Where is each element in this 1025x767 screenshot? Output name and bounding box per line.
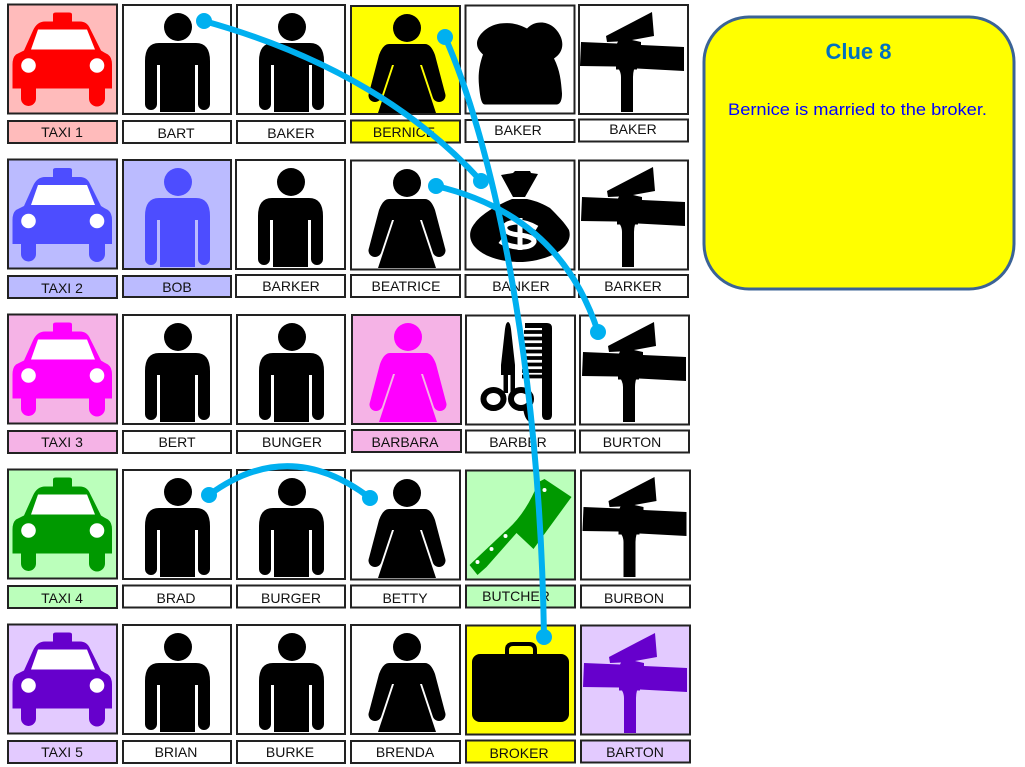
icon: Beatrice: [351, 160, 460, 270]
label: BERT: [123, 431, 231, 453]
label: BART: [123, 121, 231, 143]
row 1: red taxi: [8, 4, 688, 143]
label: TAXI 4: [8, 586, 117, 608]
label: BURGER: [237, 586, 345, 608]
label: BRIAN: BRIAN: [155, 744, 197, 760]
label: BAKER surname: BAKER: [267, 125, 315, 141]
connector: Bernice to broker: [437, 29, 552, 645]
label: BAKER surname: [237, 121, 345, 143]
label: BURKE: BURKE: [266, 744, 314, 760]
label: BROKER: BROKER: [489, 745, 549, 761]
icon: Brian: [123, 625, 231, 734]
label: TAXI 5: TAXI 5: [41, 744, 83, 760]
icon: taxi 1: [8, 4, 117, 114]
label: BURTON: BURTON: [603, 434, 661, 450]
label: BUTCHER: [466, 586, 575, 608]
icon: street sign: [579, 160, 688, 270]
row 4: green taxi: [8, 470, 690, 608]
label: BETTY: [351, 586, 460, 608]
label: TAXI 3: [8, 431, 117, 453]
label: BAKER occupation: [466, 120, 574, 142]
label: BRAD: BRAD: [157, 590, 195, 606]
icon: Bob: [123, 160, 231, 269]
icon: Bunger man: [237, 315, 345, 424]
label: BEATRICE: BEATRICE: [372, 278, 440, 294]
label: BARBARA: [352, 430, 461, 452]
row 3: magenta taxi: [8, 314, 689, 453]
label: BERT: BERT: [158, 434, 196, 450]
row 2: blue taxi: [8, 160, 688, 298]
icon: Bert: [123, 315, 231, 424]
icon: Burke man: [237, 625, 345, 734]
icon: Bernice: [351, 6, 460, 114]
label: BAKER street: BAKER: [609, 121, 657, 137]
label: BERNICE: BERNICE: [373, 124, 435, 140]
label: BRENDA: BRENDA: [376, 744, 435, 760]
icon: Baker man: [237, 5, 345, 114]
label: BARTON: [581, 740, 690, 762]
label: TAXI 5: [8, 741, 117, 763]
label: BRENDA: [351, 741, 460, 763]
label: BARBER: BARBER: [489, 434, 547, 450]
label: BUTCHER: BUTCHER: [482, 588, 550, 604]
label: BURBON: [581, 586, 690, 608]
text: clue sentence: Bernice is married to the broker.: [728, 100, 987, 119]
icon: bread: [466, 6, 574, 114]
label: BRAD: [123, 586, 231, 608]
label: TAXI 4: TAXI 4: [41, 590, 83, 606]
icon: Betty: [351, 470, 460, 580]
label: TAXI 3: TAXI 3: [41, 434, 83, 450]
icon: street sign: [579, 5, 688, 114]
label: BUNGER: BUNGER: [262, 434, 322, 450]
icon: Burger man: [237, 470, 345, 579]
connector: Beatrice to Burton: [428, 178, 606, 340]
icon: Barbara: [352, 315, 461, 424]
label: BARTON: BARTON: [606, 744, 664, 760]
label: BURKE: [237, 741, 345, 763]
row 5: purple taxi: [8, 624, 690, 763]
label: TAXI 1: TAXI 1: [41, 124, 83, 140]
label: BROKER: [466, 740, 575, 762]
label: BAKER occupation: BAKER: [494, 122, 542, 138]
label: BUNGER: [237, 431, 345, 453]
icon: street sign: [581, 470, 690, 580]
label: BURGER: BURGER: [261, 590, 321, 606]
label: BARKER street: [579, 275, 688, 297]
label: BARKER surname: [236, 275, 345, 297]
connector: Bart to banker: [196, 13, 489, 189]
connector: Brad to Betty: [201, 466, 378, 506]
label: BARBER: [466, 430, 575, 452]
label: BETTY: BETTY: [382, 590, 428, 606]
icon: Brad: [123, 470, 231, 579]
label: BANKER: BANKER: [492, 278, 550, 294]
label: BRIAN: [123, 741, 231, 763]
label: BURBON: BURBON: [604, 590, 664, 606]
label: BARKER surname: BARKER: [262, 278, 320, 294]
label: BURTON: [580, 430, 689, 452]
label: BARKER street: BARKER: [604, 278, 662, 294]
icon: money bag: [466, 160, 574, 270]
label: BART: BART: [157, 125, 195, 141]
icon: taxi 4: [8, 470, 117, 578]
icon: Bart: [123, 5, 231, 114]
label: TAXI 2: TAXI 2: [41, 280, 83, 296]
label: BANKER: [466, 275, 574, 297]
label: BOB: BOB: [162, 279, 192, 295]
icon: cleaver: [466, 470, 575, 580]
panel: clue 8: [704, 17, 1014, 289]
label: BOB: [123, 276, 231, 297]
label: TAXI 1: [8, 121, 117, 143]
icon: street sign: [580, 316, 689, 424]
icon: taxi 2: [8, 160, 117, 268]
icon: scissors and comb: [466, 316, 575, 424]
icon: briefcase: [466, 626, 575, 734]
label: TAXI 2: [8, 276, 117, 298]
label: BERNICE: [351, 120, 460, 142]
label: BARBARA: BARBARA: [372, 434, 439, 450]
icon: taxi 5: [8, 624, 117, 734]
label: BAKER street: [579, 120, 688, 142]
icon: street sign: [581, 626, 690, 734]
label: BEATRICE: [351, 275, 460, 297]
heading: Clue 8: Clue 8: [825, 39, 892, 64]
icon: Barker man: [236, 160, 345, 269]
icon: Brenda: [351, 625, 460, 734]
icon: taxi 3: [8, 314, 117, 424]
